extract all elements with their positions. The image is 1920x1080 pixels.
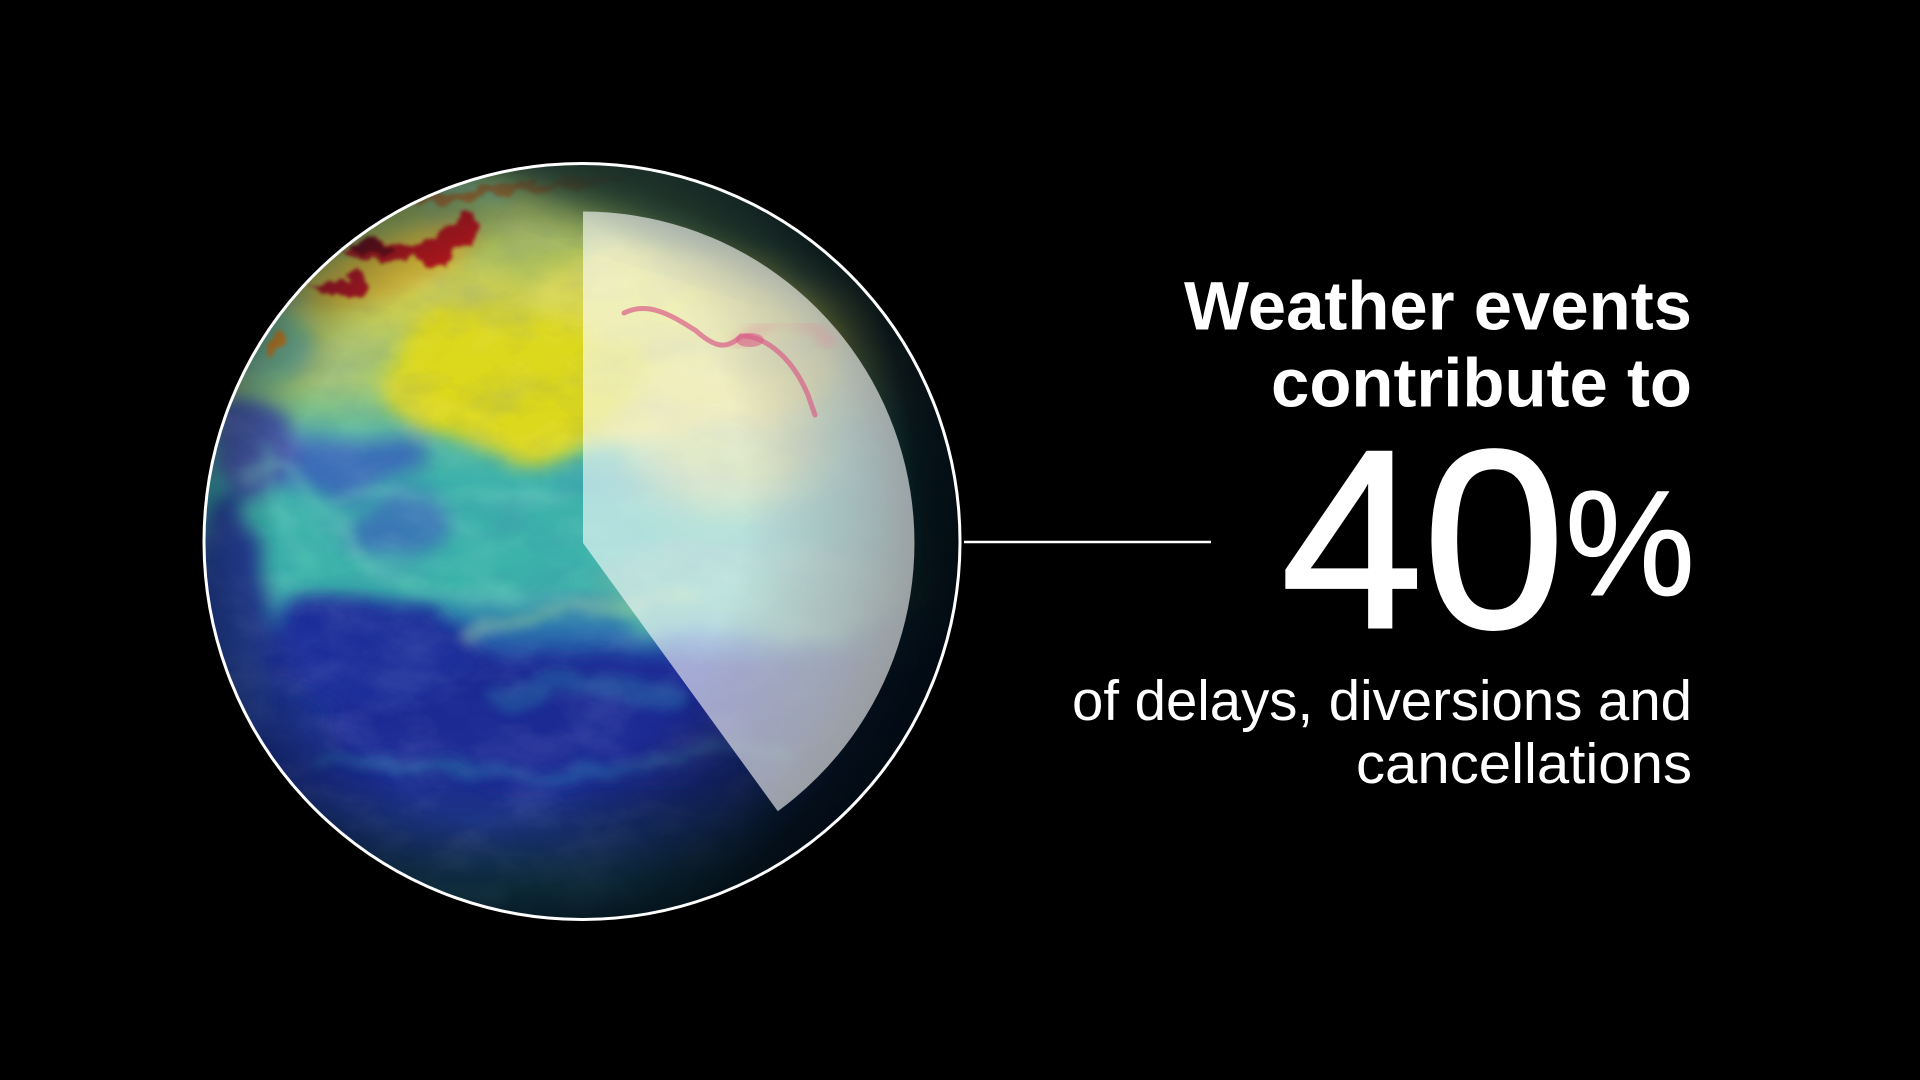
pink plume haze (735, 327, 830, 345)
globe with pie overlay (180, 100, 980, 940)
globe imagery (206, 165, 958, 918)
atmospheric colour fields (206, 175, 846, 732)
description text (1072, 669, 1692, 796)
dusk shadow over upper right (490, 165, 842, 299)
40% pie wedge (583, 212, 914, 811)
orange halo (312, 218, 482, 311)
connector line (964, 541, 1211, 543)
description text: cancellations (1356, 732, 1692, 796)
big number 40%: % (1565, 459, 1695, 627)
globe outline (204, 164, 960, 920)
cloud texture light (227, 204, 728, 872)
infographic canvas (202, 162, 1690, 921)
big number 40% (1281, 397, 1695, 681)
day-night shading (348, 165, 958, 918)
red storm patches (265, 178, 591, 360)
rim vignette (206, 165, 874, 916)
cloud texture dark (282, 210, 620, 612)
big number 40%: 40 (1281, 397, 1565, 681)
right-side yellow wash (618, 411, 832, 528)
pink plume core (624, 308, 815, 415)
soft light teal swirls (238, 441, 735, 789)
heading (1184, 268, 1692, 422)
heading: contribute to (1271, 344, 1692, 422)
heading: Weather events (1184, 268, 1692, 344)
description text: of delays, diversions and (1072, 669, 1692, 733)
